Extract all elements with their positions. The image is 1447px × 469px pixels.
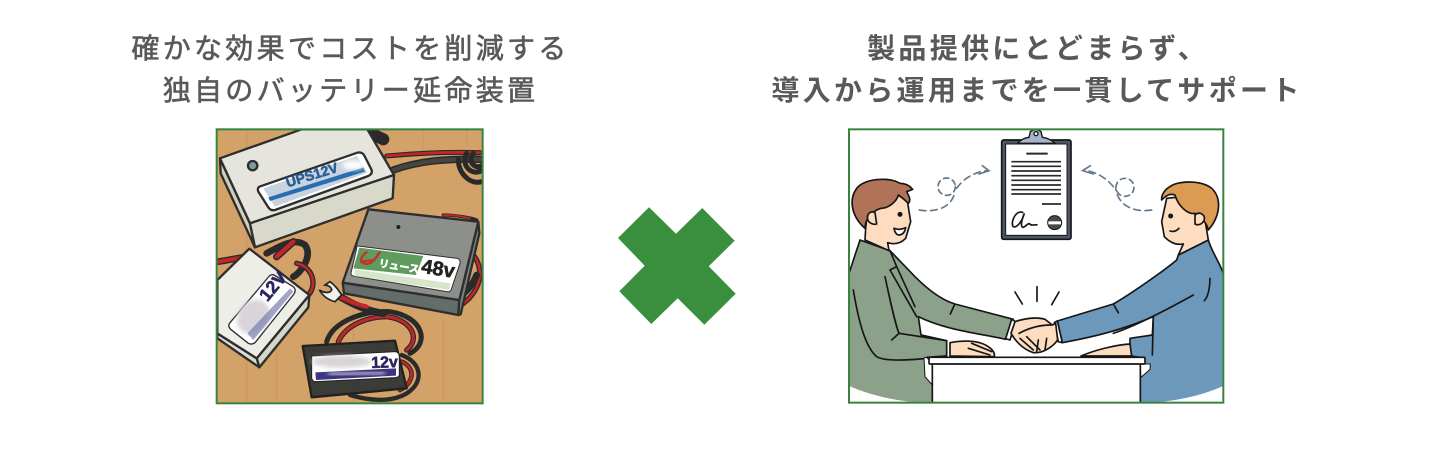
device: white 12V [217,249,309,367]
dashed arrows [919,166,1152,211]
cables: black device loop [327,311,421,353]
cables: small white device [218,257,247,262]
heading: battery device [131,33,570,106]
person: left man [849,179,1016,403]
label: white 12V [230,268,293,340]
table [929,357,1145,405]
label: UPS12V [263,156,367,207]
heading: support [771,33,1303,106]
panel: handshake illustration [849,129,1223,405]
label: UPS12V: UPS12V [284,159,340,190]
label: 48V: リュース [378,258,420,276]
label: white 12V: 12V [255,268,291,305]
icon: green multiply mark [618,207,736,325]
cables: top right [218,133,483,400]
clipboard [1002,129,1071,239]
label: 48V [353,248,457,290]
label: black 12V: 12v [371,354,398,372]
heading: support: 導入から運用までを一貫してサポート [771,75,1303,106]
device: UPS12V [220,129,394,247]
panel: battery devices illustration [217,129,483,403]
panel border [217,129,483,403]
label: black 12V [312,354,398,380]
sparkle lines [1015,287,1059,305]
panel border [849,129,1223,403]
wood background [217,129,483,403]
heading: battery device: 独自のバッテリー延命装置 [163,75,538,106]
bottom white arcs [849,386,1223,403]
heading: support: 製品提供にとどまらず、 [867,33,1209,64]
device: grey 48V [343,209,479,315]
cables: centre device [443,215,477,220]
handshake [1011,318,1058,353]
label: 48V: 48v [420,256,457,283]
terminal fork [319,282,342,302]
person: right man [1054,182,1223,403]
heading: battery device: 確かな効果でコストを削減する [131,33,570,64]
device: black 12V [303,341,407,397]
